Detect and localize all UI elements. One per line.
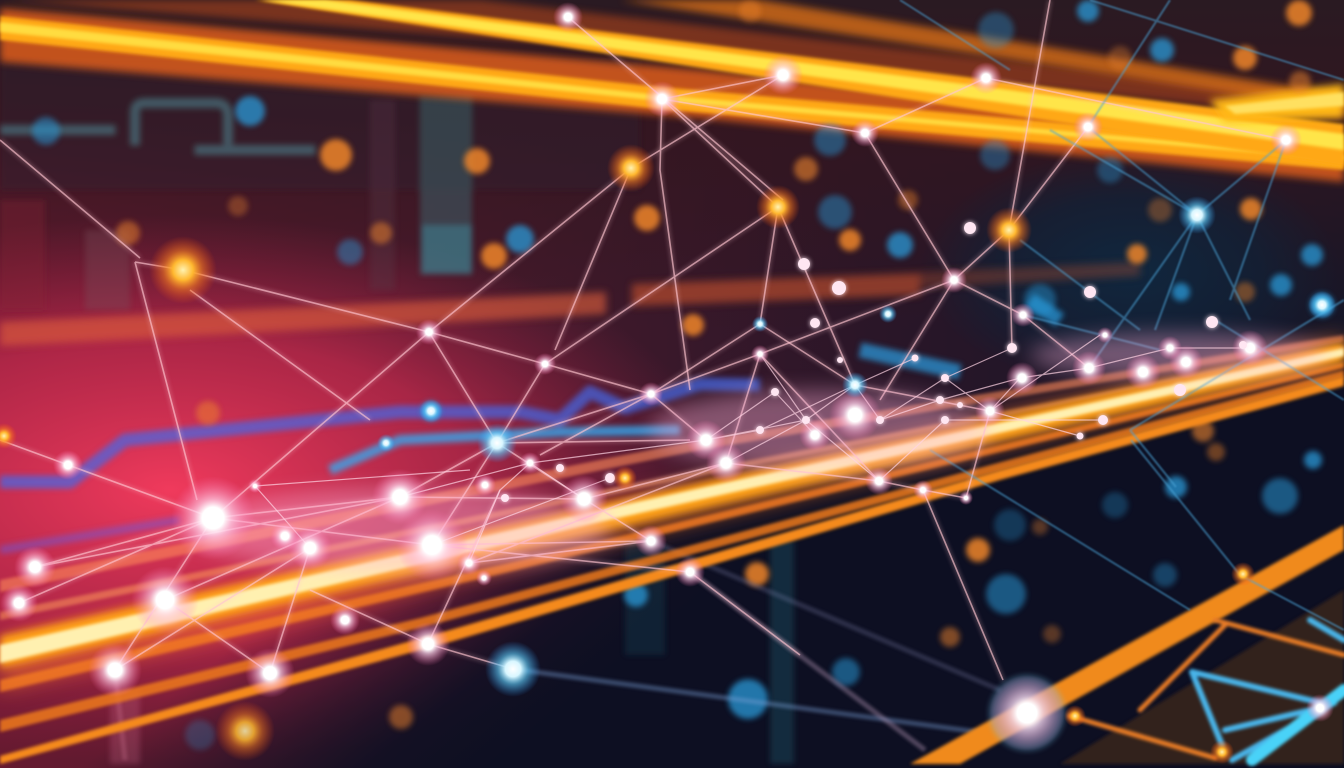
dense network mesh in the centre <box>255 335 1250 563</box>
bottom orange light beams <box>0 335 1344 764</box>
wide blurred background network lines <box>115 541 1000 760</box>
glowing orange hub nodes <box>0 144 1255 764</box>
blurred circuit panels, top left <box>0 60 794 764</box>
mid-ground blurred orange band <box>0 262 1140 346</box>
network connection lines: cyan <box>900 0 1344 630</box>
large bright hub node, lower right <box>989 675 1065 751</box>
small mesh nodes <box>501 222 1247 502</box>
lower right orange beam and perspective grid <box>910 525 1344 764</box>
cyan network nodes <box>377 291 1336 697</box>
dense node cluster glow <box>190 333 1330 572</box>
top orange and yellow light beams <box>0 0 1344 182</box>
blue circuit trace band <box>0 300 1060 550</box>
